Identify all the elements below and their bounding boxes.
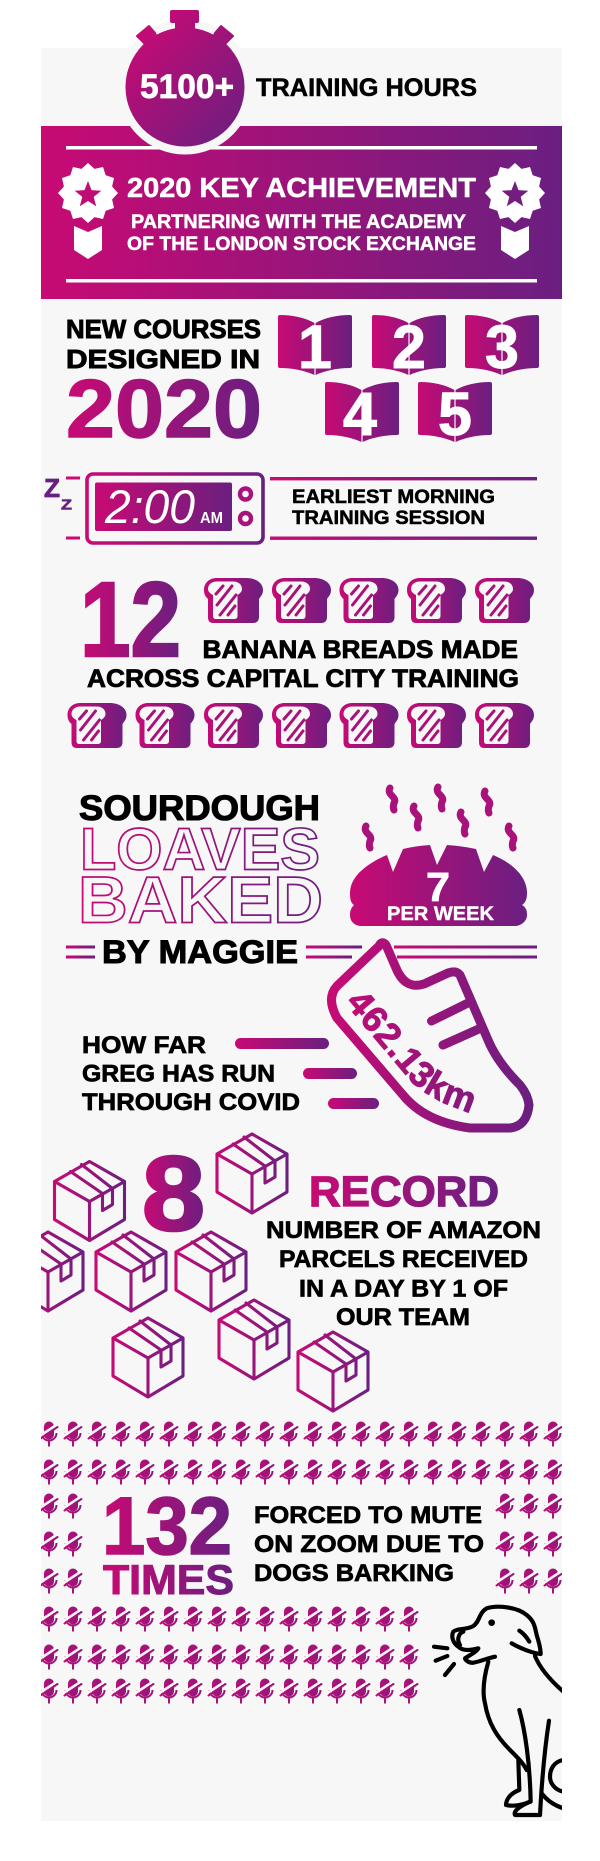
heading: training hours: TRAINING HOURS (256, 74, 477, 102)
text block: new courses designed in 2020 (66, 314, 262, 455)
icon: book 3 (465, 313, 539, 381)
text block: new courses designed in 2020: 2020 (66, 362, 262, 455)
text block: new courses designed in 2020: DESIGNED IN (66, 344, 260, 374)
text block: earliest morning training session: TRAINING SESSION (292, 508, 485, 529)
icon: stopwatch with 5100+: 5100+ (140, 68, 234, 106)
icon: barking dog (434, 1607, 563, 1815)
icon: book 3: 3 (485, 313, 519, 381)
text block: number of Amazon parcels: OUR TEAM (336, 1304, 470, 1331)
rules right of By Maggie (306, 946, 537, 958)
text block: banana breads made: ACROSS CAPITAL CITY TRAINING (87, 665, 519, 693)
text block: forced to mute on zoom: DOGS BARKING (254, 1560, 454, 1587)
icons: top row of bread slices (204, 578, 534, 623)
icon: left award rosette (58, 163, 118, 259)
icon: alarm clock 2:00 AM (66, 474, 263, 543)
icon: alarm clock 2:00 AM: 2:00 (104, 480, 195, 533)
banner text line 2: OF THE LONDON STOCK EXCHANGE (127, 234, 476, 255)
icon: book 1: 1 (298, 313, 332, 381)
icon: book 4 (325, 380, 399, 448)
icon: running shoe with distance (326, 938, 534, 1132)
icon: running shoe with distance: 462.13km (348, 994, 474, 1114)
number: 8 parcels: 8 (142, 1135, 205, 1253)
icon: stopwatch with 5100+ (118, 10, 252, 154)
text block: how far Greg has run: HOW FAR (82, 1032, 206, 1059)
icon: right award rosette (485, 163, 545, 259)
icon: sleeping Zz: Z (61, 496, 72, 514)
panel: 2020 key achievement banner (41, 126, 562, 299)
text block: sourdough loaves baked: BAKED (78, 862, 323, 936)
text block: forced to mute on zoom (254, 1502, 484, 1587)
rule below earliest session (270, 536, 537, 540)
text block: number of Amazon parcels: NUMBER OF AMAZON (266, 1217, 541, 1244)
text block: sourdough loaves baked (78, 789, 323, 936)
text block: number of Amazon parcels (266, 1217, 541, 1331)
number: 132 times: TIMES (103, 1556, 234, 1603)
number: 12 banana breads: 12 (80, 561, 181, 679)
icon: sleeping Zz (44, 473, 72, 514)
icon: book 4: 4 (343, 380, 377, 448)
banner text line 1: PARTNERING WITH THE ACADEMY (131, 212, 466, 233)
rule above earliest session (270, 477, 537, 480)
speed bars (235, 1038, 379, 1109)
icon: book 2 (372, 313, 446, 381)
banner heading: 2020 KEY ACHIEVEMENT (127, 172, 476, 203)
text block: how far Greg has run: GREG HAS RUN (82, 1060, 275, 1088)
icons: bottom row of bread slices (68, 703, 534, 748)
icon: sourdough loaf with 7 per week: 7 (426, 864, 450, 910)
icons: muted microphones (40, 1422, 562, 1704)
text block: sourdough loaves baked: LOAVES (80, 816, 320, 882)
icon: book 5: 5 (438, 380, 472, 448)
icons: parcels (13, 1134, 368, 1411)
icon: book 1 (278, 313, 352, 381)
heading: by Maggie: BY MAGGIE (102, 934, 298, 970)
number: 132 times: 132 (102, 1481, 232, 1572)
text block: how far Greg has run: THROUGH COVID (82, 1089, 300, 1116)
icon: steam (365, 787, 514, 848)
icon: sleeping Zz: Z (44, 473, 60, 503)
text block: banana breads made: BANANA BREADS MADE (202, 636, 518, 664)
icon: sourdough loaf with 7 per week: PER WEEK (387, 904, 494, 925)
text block: how far Greg has run (82, 1032, 300, 1116)
text block: earliest morning training session: EARLIEST MORNING (292, 487, 495, 508)
text block: forced to mute on zoom: FORCED TO MUTE (254, 1502, 482, 1529)
icon: sourdough loaf with 7 per week (350, 845, 527, 926)
icon: alarm clock 2:00 AM: AM (200, 510, 223, 527)
text block: sourdough loaves baked: SOURDOUGH (79, 789, 320, 828)
icon: book 2: 2 (392, 313, 426, 381)
text block: banana breads made (87, 636, 519, 693)
text block: number of Amazon parcels: IN A DAY BY 1 OF (299, 1276, 508, 1302)
text block: new courses designed in 2020: NEW COURSES (66, 314, 261, 344)
text block: forced to mute on zoom: ON ZOOM DUE TO (254, 1531, 484, 1558)
text block: number of Amazon parcels: PARCELS RECEIVED (279, 1246, 528, 1273)
text block: earliest morning training session (292, 487, 495, 529)
heading: record: RECORD (309, 1168, 499, 1216)
icon: book 5 (418, 380, 492, 448)
rules left of By Maggie (66, 946, 95, 958)
